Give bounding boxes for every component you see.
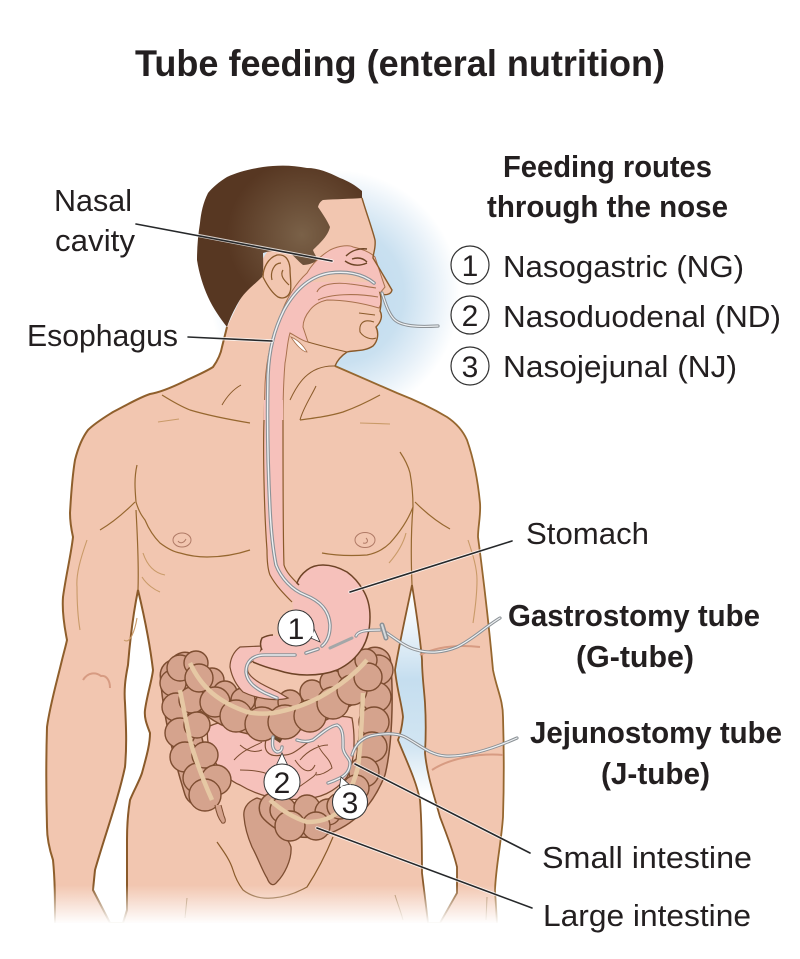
blue glow behind head [210,170,460,420]
appendix [215,805,225,823]
jejunostomy tube [352,734,517,756]
facial profile [335,198,392,366]
jaw and neck lines [222,342,347,420]
rectum [244,798,291,885]
label: jejunostomy tube: Jejunostomy tube [530,715,782,750]
small intestine [207,716,354,799]
title: Tube feeding (enteral nutrition) [135,43,665,84]
colon underlay [176,663,376,822]
legend item 1: Nasogastric (NG) [503,249,744,284]
label: stomach: Stomach [526,516,649,551]
large intestine [160,649,393,885]
legend heading [487,149,728,224]
legend: feeding routes through the nose [451,149,781,385]
bottom fade [0,885,800,924]
colon bumps [160,649,393,841]
label: nasal cavity: Nasal [54,183,132,218]
legend item 3: 3 [462,351,478,384]
leader lines [136,224,532,908]
legend item 2: Nasoduodenal (ND) [503,299,781,334]
badge 2: 2 [274,767,290,800]
legend item 2: 2 [462,300,478,333]
duodenum [230,646,288,700]
stomach [253,565,370,675]
badge 3: 3 [342,787,358,820]
chest and arm contours [100,395,450,590]
body silhouette [46,190,504,923]
label: gastrostomy tube: Gastrostomy tube [508,598,760,633]
gap between left arm and torso [93,590,153,923]
label: small intestine: Small intestine [542,840,752,875]
badge 2 [264,753,300,800]
label: jejunostomy tube [530,715,782,791]
gap between right arm and torso [395,585,457,923]
badge 3 [332,777,368,820]
legend heading: Feeding routes [503,149,712,184]
ear [263,255,291,298]
groin line [217,837,333,898]
legend item 3: Nasojejunal (NJ) [503,349,737,384]
esophagus [264,400,299,602]
hair [197,166,362,327]
label: nasal cavity [54,183,135,258]
legend item 1: 1 [462,250,478,283]
legend heading: through the nose [487,189,728,224]
feeding tube: nasal routes [246,272,438,783]
colon band [180,660,367,822]
label: jejunostomy tube: (J-tube) [601,756,710,791]
nipples [173,532,375,548]
label: large intestine: Large intestine [543,898,751,933]
gastrostomy tube [330,618,500,652]
body outline [335,366,504,923]
illustration: human body [46,166,504,923]
oral and nasal cavity [264,246,385,420]
eye and brow [345,249,367,265]
badge 1: 1 [288,613,304,646]
label: nasal cavity: cavity [55,223,135,258]
badge 1 [278,610,320,646]
label: gastrostomy tube: (G-tube) [576,639,694,674]
label: esophagus: Esophagus [27,318,178,353]
label: gastrostomy tube [508,598,760,674]
